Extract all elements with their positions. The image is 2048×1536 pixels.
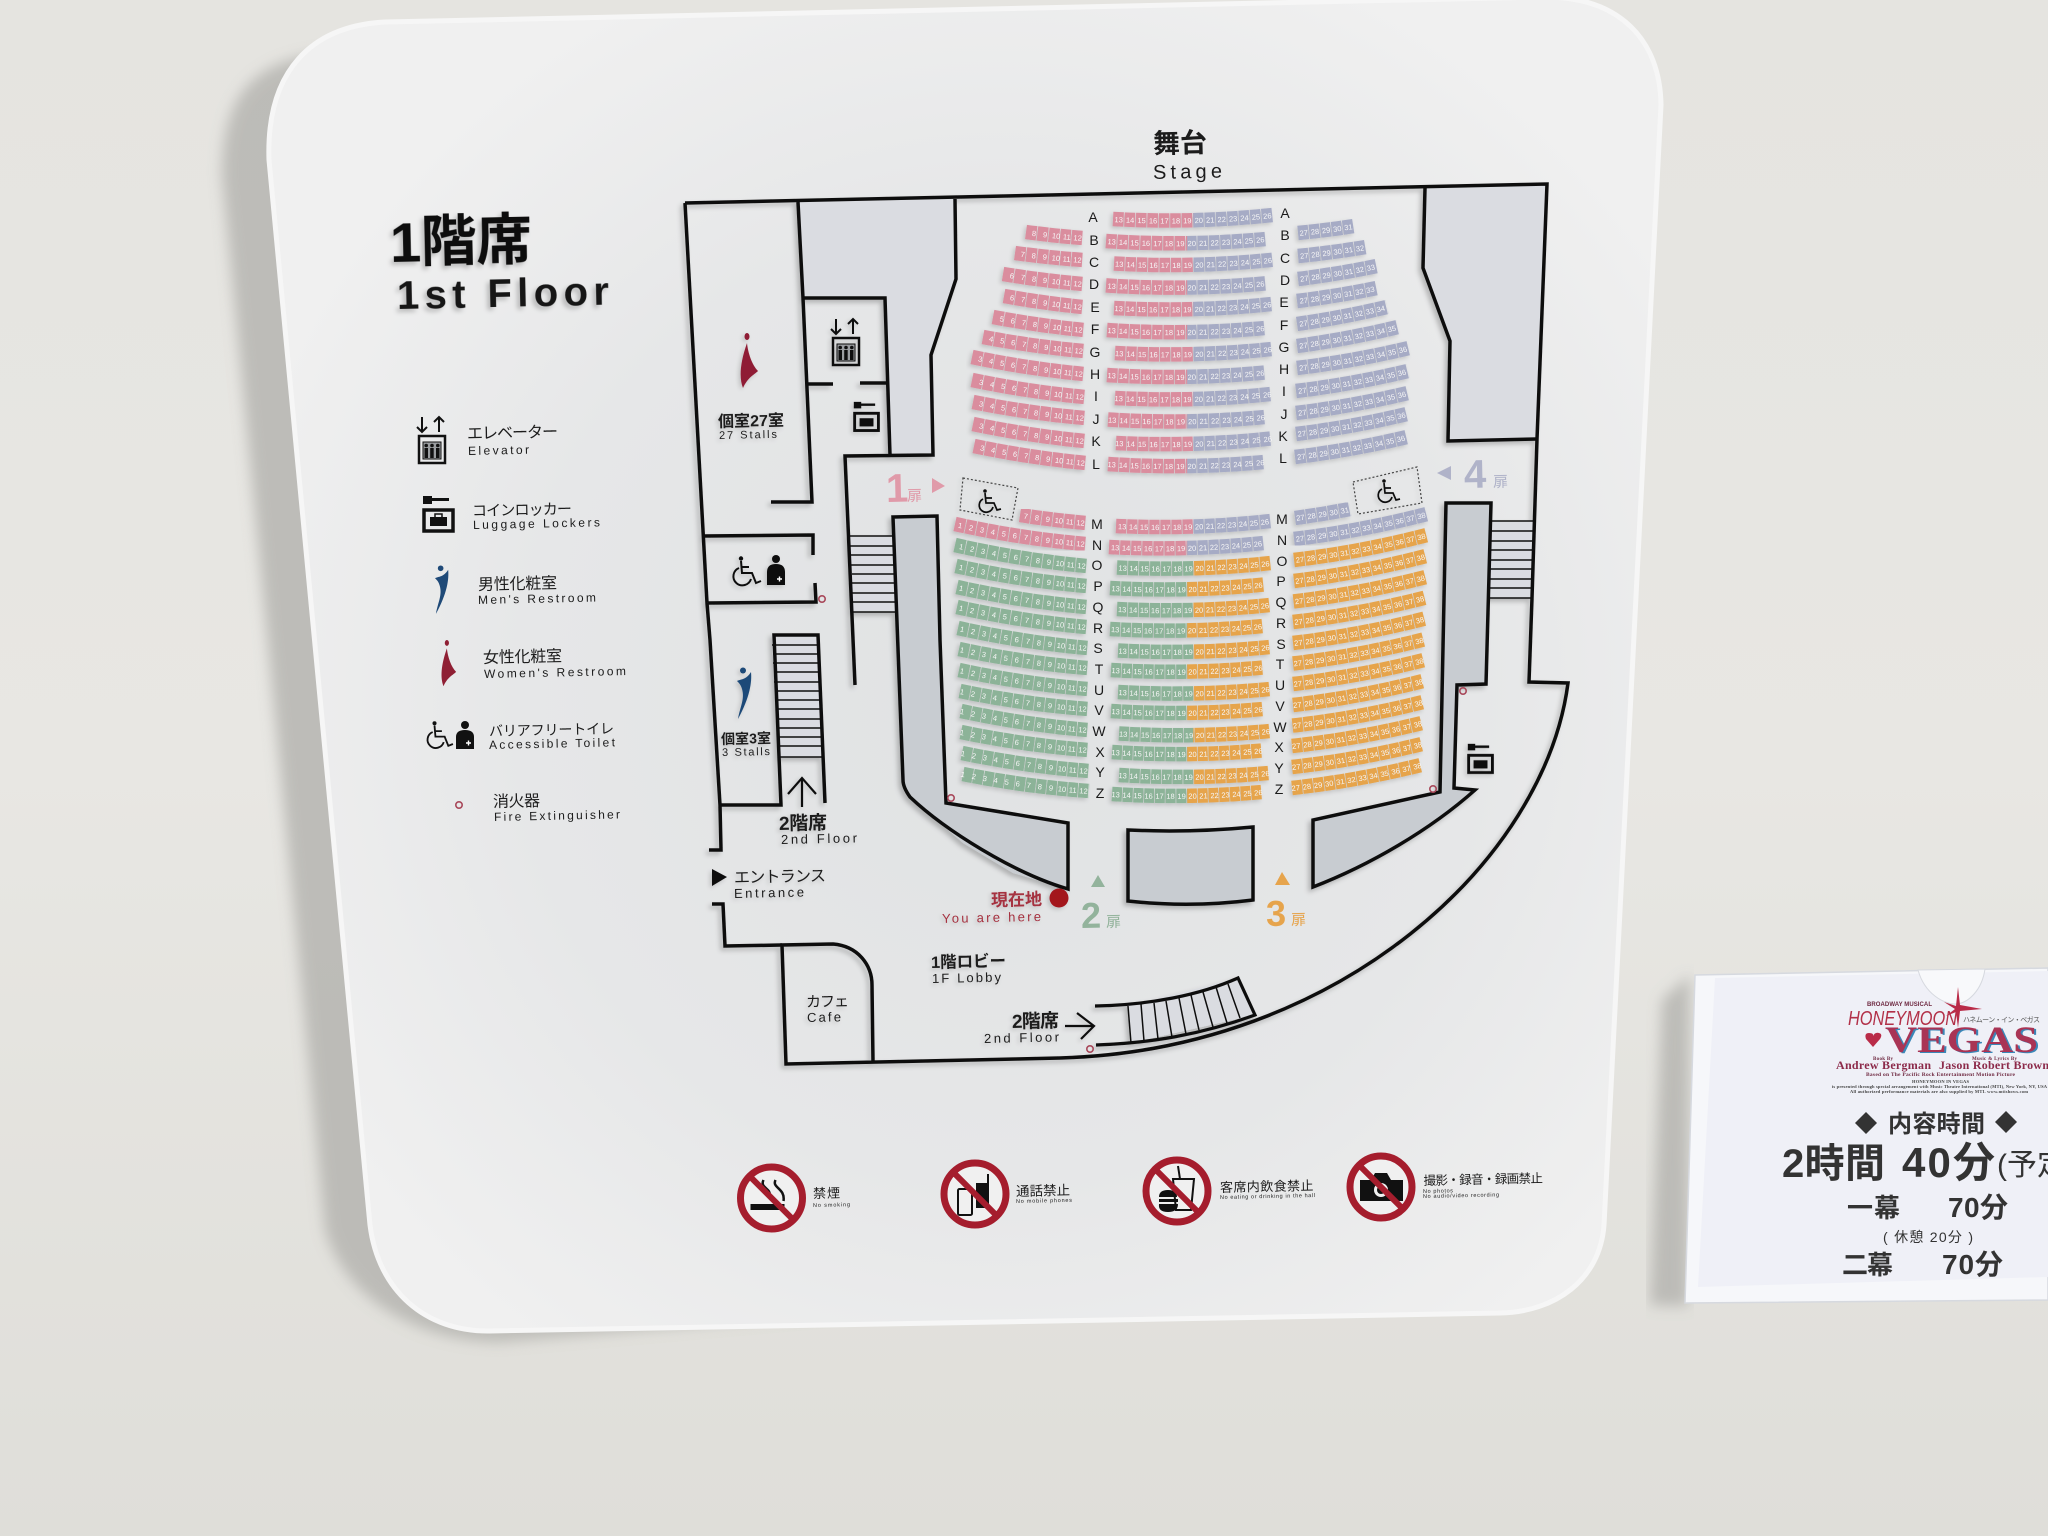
row letters: M xyxy=(1276,511,1288,527)
seats: upper left block: 5 6 7 8 9 10 11 12 xyxy=(1000,316,1082,333)
row letters: D xyxy=(1089,276,1099,292)
label: 2nd floor lobby: 2階席 xyxy=(1012,1010,1059,1033)
seats: lower centre block: 13 14 15 16 17 18 19 20 21 22 23 24 25 26 xyxy=(1118,685,1270,698)
seats: lower centre block: 13 14 15 16 17 18 19 20 21 22 23 24 25 26 xyxy=(1118,517,1269,532)
paper sheet xyxy=(1698,971,2048,1287)
total running time: 40分 xyxy=(1902,1139,1995,1186)
row letters: Y xyxy=(1095,764,1105,780)
seats: lower left pink rows: 1 2 3 4 5 6 7 8 9 10 11 12 xyxy=(958,523,1084,547)
total running time xyxy=(1782,1139,2048,1186)
seats: lower left green rows: 1 2 3 4 5 6 7 8 9 10 11 12 xyxy=(959,666,1087,693)
holder notch xyxy=(1918,969,1985,1004)
seats: upper centre block: 13 14 15 16 17 18 19 20 21 22 23 24 25 26 xyxy=(1115,258,1272,268)
act two: 二幕 xyxy=(1842,1250,1893,1280)
seats: lower right orange rows: 27 28 29 30 31 32 33 34 35 36 37 38 xyxy=(1291,761,1422,793)
seats: lower centre block: 13 14 15 16 17 18 19 20 21 22 23 24 25 26 xyxy=(1111,580,1263,594)
flyer holder shadow xyxy=(1650,975,1690,1306)
act two: 70分 xyxy=(1942,1249,2003,1280)
row letters: F xyxy=(1280,317,1288,333)
seats: upper left block: 3 4 5 6 7 8 9 10 11 12 xyxy=(979,380,1084,400)
plan icons xyxy=(712,319,1492,1039)
row letters: V xyxy=(1275,698,1285,714)
row letters: U xyxy=(1094,682,1104,698)
seats: lower centre block: 13 14 15 16 17 18 19 20 21 22 23 24 25 26 xyxy=(1111,787,1263,800)
legend: luggage lockers: コインロッカー xyxy=(472,501,572,520)
legend: men's restroom: 男性化粧室 xyxy=(478,574,557,594)
legend: accessible toilet: バリアフリートイレ xyxy=(489,720,614,739)
door 2: 2 xyxy=(1081,895,1101,936)
row letters: G xyxy=(1090,344,1100,360)
seats: lower left green rows: 1 2 3 4 5 6 7 8 9 10 11 12 xyxy=(959,706,1087,734)
show logo: All authorized performance materials are also supplied by MTI. www.mtishows.com xyxy=(1850,1089,2028,1094)
row letters: H xyxy=(1279,361,1289,377)
door 2 xyxy=(1081,875,1121,936)
panel shadow on wall xyxy=(222,40,1200,1342)
door 4 xyxy=(1437,453,1508,497)
seats: lower right blue rows: 27 28 29 30 31 32 33 34 35 36 37 38 xyxy=(1295,510,1426,543)
row letters: S xyxy=(1276,636,1286,652)
title: 1st floor: 1階席 xyxy=(389,208,533,274)
show logo: HONEYMOON xyxy=(1848,1008,1957,1030)
sign: no eating or drinking: No eating or drinking in the hall xyxy=(1220,1193,1315,1201)
seats: upper centre block: 13 14 15 16 17 18 19 20 21 22 23 24 25 26 xyxy=(1115,346,1272,358)
seats: lower right orange rows: 27 28 29 30 31 32 33 34 35 36 37 38 xyxy=(1294,573,1426,606)
seats: lower centre block: 13 14 15 16 17 18 19 20 21 22 23 24 25 26 xyxy=(1111,539,1262,553)
seats: lower right orange rows: 27 28 29 30 31 32 33 34 35 36 37 38 xyxy=(1295,552,1426,585)
seats: lower centre block: 13 14 15 16 17 18 19 20 21 22 23 24 25 26 xyxy=(1118,768,1270,781)
legend: luggage lockers xyxy=(423,496,600,532)
seats: lower right blue rows: 27 28 29 30 31 xyxy=(1296,505,1350,522)
show logo: BROADWAY MUSICAL xyxy=(1867,1002,1932,1008)
icon: lockers right xyxy=(1468,744,1492,773)
floor plan walls xyxy=(685,184,1568,1064)
show logo: Jason Robert Brown xyxy=(1939,1058,2048,1072)
legend: elevator: Elevator xyxy=(468,443,529,458)
seats: upper left block: 8 9 10 11 12 xyxy=(1032,230,1082,241)
seats: lower left green rows: 1 2 3 4 5 6 7 8 9 10 11 12 xyxy=(959,624,1087,652)
seats: lower left green rows: 1 2 3 4 5 6 7 8 9 10 11 12 xyxy=(959,727,1087,754)
legend: women's restroom: 女性化粧室 xyxy=(483,647,562,667)
sign: no mobile phones xyxy=(944,1163,1072,1225)
row letters: G xyxy=(1279,339,1289,355)
upper right grey block xyxy=(1423,185,1546,441)
door 1: 扉 xyxy=(907,488,922,505)
flyer xyxy=(1685,968,2048,1303)
row letters: F xyxy=(1091,321,1099,337)
seats: upper left block: 3 4 5 6 7 8 9 10 11 12 xyxy=(979,424,1084,444)
seats: upper right block xyxy=(1291,219,1410,468)
intermission: ( 休憩 20分 ) xyxy=(1883,1229,1973,1245)
label: cafe: Cafe xyxy=(807,1009,841,1025)
label: 2nd floor stairs: 2nd Floor xyxy=(781,830,858,847)
right aisle outline xyxy=(1313,503,1491,887)
door 3: 扉 xyxy=(1291,912,1306,929)
acrylic holder xyxy=(1685,968,2048,1303)
seats: upper right block: 27 28 29 30 31 32 33 34 35 36 xyxy=(1298,370,1406,394)
seats: lower left green rows: 1 2 3 4 5 6 7 8 9 10 11 12 xyxy=(959,645,1087,672)
show logo: HONEYMOON IN VEGAS xyxy=(1912,1079,1969,1084)
label: entrance: Entrance xyxy=(734,885,804,901)
seats: lower left green rows: 1 2 3 4 5 6 7 8 9 10 11 12 xyxy=(960,748,1088,775)
stairs: left upper fill xyxy=(850,536,896,612)
legend: elevator xyxy=(417,417,558,463)
plan labels xyxy=(718,412,1060,1046)
seats: lower centre block: 13 14 15 16 17 18 19 20 21 22 23 24 25 26 xyxy=(1118,643,1270,656)
show logo: ハネムーン・イン・ベガス xyxy=(1963,1015,2040,1024)
seats: upper left block: 6 7 8 9 10 11 12 xyxy=(1010,295,1082,310)
label: you are here: 現在地 xyxy=(991,890,1042,910)
upper left grey block xyxy=(798,199,956,455)
show logo: VEGAS xyxy=(1885,1020,2038,1061)
legend: accessible toilet: Accessible Toilet xyxy=(489,735,616,752)
right aisle block xyxy=(1313,503,1491,887)
icon: men's restroom xyxy=(737,668,751,719)
seats: lower left green rows: 1 2 3 4 5 6 7 8 9 10 11 12 xyxy=(959,586,1086,610)
sign: no photos or recording: 撮影・録音・録画禁止 xyxy=(1423,1170,1543,1188)
stage label: Stage xyxy=(1153,161,1222,184)
left aisle outline xyxy=(893,516,1068,889)
center block xyxy=(1128,827,1253,904)
seats: upper centre block: 13 14 15 16 17 18 19 20 21 22 23 24 25 26 xyxy=(1108,415,1265,425)
label: cafe: カフェ xyxy=(806,993,849,1011)
seats: lower left green rows: 1 2 3 4 5 6 7 8 9 10 11 12 xyxy=(959,544,1086,569)
seats: upper centre block: 13 14 15 16 17 18 19 20 21 22 23 24 25 26 xyxy=(1108,460,1264,470)
label: 27 stalls xyxy=(718,412,784,442)
row letters: K xyxy=(1278,428,1288,444)
door 3: 3 xyxy=(1266,893,1286,934)
seats: upper right block: 27 28 29 30 31 32 33 34 35 36 xyxy=(1298,412,1406,437)
label: lobby xyxy=(931,950,1006,986)
door 2: 扉 xyxy=(1106,914,1121,931)
seats: upper centre block xyxy=(1102,208,1273,477)
row letters: M xyxy=(1091,516,1103,532)
act one: 一幕 xyxy=(1847,1193,1900,1223)
seats: upper left block: 3 4 5 6 7 8 9 10 11 12 xyxy=(980,446,1084,466)
label: 3 stalls: 3 Stalls xyxy=(722,746,771,759)
interior walls: restrooms and elevator xyxy=(771,199,956,685)
row letters: R xyxy=(1093,620,1103,636)
sign panel xyxy=(269,0,1661,1331)
label: 2nd floor stairs xyxy=(779,812,858,847)
label: 2nd floor stairs: 2階席 xyxy=(779,812,827,835)
seats: upper left block: 6 7 8 9 10 11 12 xyxy=(1010,273,1082,287)
center block outline xyxy=(1128,827,1253,904)
seats: lower right orange rows: 27 28 29 30 31 32 33 34 35 36 37 38 xyxy=(1293,656,1424,688)
row letters: W xyxy=(1273,719,1287,735)
show logo: Based on The Pacific Rock Entertainment Motion Picture xyxy=(1866,1072,2016,1078)
label: entrance xyxy=(734,868,826,901)
sign: no mobile phones: No mobile phones xyxy=(1016,1198,1072,1205)
row letters: P xyxy=(1093,578,1103,594)
seats: lower left green rows: 1 2 3 4 5 6 7 8 9 10 11 12 xyxy=(959,565,1086,589)
act two xyxy=(1842,1249,2003,1280)
seats: lower right orange rows: 27 28 29 30 31 32 33 34 35 36 37 38 xyxy=(1295,531,1426,564)
legend: luggage lockers: Luggage Lockers xyxy=(473,515,600,532)
seats: upper centre block: 13 14 15 16 17 18 19 20 21 22 23 24 25 26 xyxy=(1114,213,1272,224)
sign: no smoking: 禁煙 xyxy=(813,1185,840,1201)
row letters: I xyxy=(1094,388,1098,404)
legend: fire extinguisher: Fire Extinguisher xyxy=(494,807,620,824)
show logo: VEGAS xyxy=(1887,1021,2040,1062)
seats: lower centre block: 13 14 15 16 17 18 19 20 21 22 23 24 25 26 xyxy=(1119,727,1270,740)
entrance triangle xyxy=(712,869,727,886)
seats: lower left green rows: 1 2 3 4 5 6 7 8 9 10 11 12 xyxy=(959,687,1087,713)
row letters: X xyxy=(1095,744,1105,760)
seats: lower centre block: 13 14 15 16 17 18 19 20 21 22 23 24 25 26 xyxy=(1118,559,1270,573)
wheelchair space right xyxy=(1353,467,1422,514)
show logo: Music & Lyrics By xyxy=(1972,1057,2018,1062)
show logo xyxy=(1832,987,2048,1094)
label: 27 stalls: 27 Stalls xyxy=(719,429,778,442)
row letters: J xyxy=(1280,406,1288,422)
seats: lower right orange rows: 27 28 29 30 31 32 33 34 35 36 37 38 xyxy=(1293,635,1424,668)
show logo: is presented through special arrangement with Music Theatre International (MTI), New York, NY, USA xyxy=(1832,1084,2048,1089)
row letters: P xyxy=(1276,573,1286,589)
seats: upper left block: 4 5 6 7 8 9 10 11 12 xyxy=(989,336,1082,354)
upper right block outline xyxy=(1423,188,1537,441)
sign: no smoking: No smoking xyxy=(813,1202,850,1209)
total running time: 2時間 xyxy=(1782,1142,1885,1186)
legend: women's restroom xyxy=(442,640,626,686)
stairs: lobby fill xyxy=(1128,978,1255,1043)
seats: upper right block: 27 28 29 30 31 32 33 34 35 36 xyxy=(1298,392,1406,416)
sign: no photos or recording: No audio/video recording xyxy=(1423,1192,1499,1200)
row letters: T xyxy=(1095,661,1104,677)
you are here marker xyxy=(1050,888,1068,908)
row letters: X xyxy=(1274,739,1284,755)
running time heading: 内容時間 xyxy=(1888,1111,1985,1138)
seats: lower right orange rows: 27 28 29 30 31 32 33 34 35 36 37 38 xyxy=(1294,594,1425,626)
door 1: 1 xyxy=(886,467,909,511)
seats: upper left block: 3 4 5 6 7 8 9 10 11 12 xyxy=(978,356,1082,377)
label: lobby: 1F Lobby xyxy=(932,970,1002,986)
seats: upper right block: 27 28 29 30 31 32 33 34 35 xyxy=(1300,326,1396,349)
seats: upper right block: 27 28 29 30 31 32 33 34 35 36 xyxy=(1300,346,1407,371)
seats: upper right block: 27 28 29 30 31 32 33 34 xyxy=(1300,306,1385,327)
seats: upper right block: 27 28 29 30 31 32 xyxy=(1300,246,1364,259)
show logo: Andrew Bergman xyxy=(1836,1058,1931,1072)
legend: fire extinguisher: 消火器 xyxy=(493,792,540,811)
row letters: B xyxy=(1089,232,1099,248)
seats: upper left block xyxy=(968,224,1086,474)
legend: men's restroom xyxy=(435,565,596,614)
stairs: right upper fill xyxy=(1489,521,1533,598)
row letters: S xyxy=(1093,640,1103,656)
row letters: Q xyxy=(1276,594,1287,610)
label: 3 stalls: 個室3室 xyxy=(721,730,771,747)
row letters: W xyxy=(1092,723,1106,739)
seats: upper left block: 7 8 9 10 11 12 xyxy=(1021,252,1082,263)
seats: upper centre block: 13 14 15 16 17 18 19 20 21 22 23 24 25 26 xyxy=(1116,436,1272,448)
seats: upper centre block: 13 14 15 16 17 18 19 20 21 22 23 24 25 26 xyxy=(1108,237,1264,246)
label: entrance: エントランス xyxy=(734,868,826,887)
seats: lower centre block: 13 14 15 16 17 18 19 20 21 22 23 24 25 26 xyxy=(1111,705,1263,717)
door 4: 扉 xyxy=(1493,474,1508,491)
seats: upper centre block: 13 14 15 16 17 18 19 20 21 22 23 24 25 26 xyxy=(1108,281,1264,291)
outer walls xyxy=(685,184,1568,1064)
legend: women's restroom: Women's Restroom xyxy=(484,664,626,681)
seats: lower left green rows xyxy=(950,538,1090,802)
row letters: A xyxy=(1280,205,1290,221)
row letters: N xyxy=(1277,532,1287,548)
label: 27 stalls: 個室27室 xyxy=(718,412,784,431)
seats: lower left pink rows: 7 8 9 10 11 12 xyxy=(1024,514,1084,526)
icon: accessible toilet xyxy=(733,555,785,585)
row letters: Q xyxy=(1093,599,1104,615)
seats: upper centre block: 13 14 15 16 17 18 19 20 21 22 23 24 25 26 xyxy=(1108,370,1264,380)
door 4: 4 xyxy=(1464,453,1487,497)
row letters: Y xyxy=(1274,760,1284,776)
arrow: right to 2nd floor xyxy=(1065,1013,1094,1039)
seats: upper right block: 27 28 29 30 31 xyxy=(1300,224,1352,236)
stage label xyxy=(1153,128,1222,184)
wheelchair space left xyxy=(960,478,1018,520)
row letters: J xyxy=(1092,411,1100,427)
seats: lower left green rows: 1 2 3 4 5 6 7 8 9 10 11 12 xyxy=(960,769,1088,795)
seats: upper right block: 27 28 29 30 31 32 33 xyxy=(1300,286,1374,304)
row letters: C xyxy=(1089,254,1099,270)
door 3 xyxy=(1266,872,1306,934)
row letters: K xyxy=(1091,433,1101,449)
label: 2nd floor lobby: 2nd Floor xyxy=(984,1029,1060,1046)
seats: upper right block: 27 28 29 30 31 32 33 34 35 36 xyxy=(1298,436,1405,460)
row letters: A xyxy=(1088,209,1098,225)
row letters: I xyxy=(1282,383,1286,399)
row letters: H xyxy=(1090,366,1100,382)
seats: lower right orange rows: 27 28 29 30 31 32 33 34 35 36 37 38 xyxy=(1293,677,1424,709)
left aisle block xyxy=(893,516,1068,889)
label: cafe xyxy=(806,993,849,1025)
seats: lower centre block xyxy=(1105,514,1271,807)
door 1 xyxy=(886,467,945,511)
label: you are here: You are here xyxy=(942,909,1041,926)
running time heading xyxy=(1855,1111,2017,1138)
row letters: Z xyxy=(1096,785,1105,801)
prohibition signs xyxy=(740,1156,1543,1229)
seats: lower centre block: 13 14 15 16 17 18 19 20 21 22 23 24 25 26 xyxy=(1111,622,1262,635)
icon: lockers xyxy=(854,402,878,431)
seats: upper centre block: 13 14 15 16 17 18 19 20 21 22 23 24 25 26 xyxy=(1114,302,1272,312)
legend: men's restroom: Men's Restroom xyxy=(478,591,596,607)
label: you are here xyxy=(942,890,1042,926)
legend xyxy=(417,417,626,824)
row letters: B xyxy=(1280,227,1290,243)
row letters: T xyxy=(1276,656,1285,672)
row letters: C xyxy=(1280,250,1290,266)
icon: women's restroom xyxy=(741,333,758,388)
seats: lower left pink rows xyxy=(950,509,1086,550)
label: lobby: 1階ロビー xyxy=(931,950,1006,972)
seats: lower right orange rows xyxy=(1288,528,1428,798)
seats: lower centre block: 13 14 15 16 17 18 19 20 21 22 23 24 25 26 xyxy=(1111,746,1263,759)
row letters: Z xyxy=(1275,781,1284,797)
sign: no eating or drinking: 客席内飲食禁止 xyxy=(1220,1178,1314,1195)
row letters: V xyxy=(1094,702,1104,718)
row letters: O xyxy=(1277,553,1288,569)
seats: upper left block: 3 4 5 6 7 8 9 10 11 12 xyxy=(979,401,1084,421)
sign: no photos or recording xyxy=(1350,1156,1543,1218)
seats: lower left green rows: 1 2 3 4 5 6 7 8 9 10 11 12 xyxy=(959,606,1086,630)
row letters: L xyxy=(1279,450,1287,466)
sign: no photos or recording: No photos xyxy=(1423,1188,1453,1195)
seats: lower centre block: 13 14 15 16 17 18 19 20 21 22 23 24 25 26 xyxy=(1111,663,1263,676)
row letters: E xyxy=(1279,294,1289,310)
seats: lower centre block: 13 14 15 16 17 18 19 20 21 22 23 24 25 26 xyxy=(1118,601,1269,615)
label: 2nd floor lobby xyxy=(984,1010,1060,1046)
legend: elevator: エレベーター xyxy=(467,423,558,443)
legend: accessible toilet xyxy=(428,720,616,752)
arrow: up to 2nd floor xyxy=(788,778,816,807)
seats: lower right orange rows: 27 28 29 30 31 32 33 34 35 36 37 38 xyxy=(1294,614,1425,647)
act one: 70分 xyxy=(1948,1192,2008,1223)
label: 3 stalls xyxy=(721,730,771,759)
sign: no mobile phones: 通話禁止 xyxy=(1016,1183,1070,1199)
row letters: O xyxy=(1092,557,1103,573)
row letters: E xyxy=(1090,299,1100,315)
row letters: D xyxy=(1280,272,1290,288)
title: 1st floor xyxy=(389,208,609,318)
stair rungs xyxy=(850,536,896,612)
legend: fire extinguisher xyxy=(456,792,620,824)
row letters: R xyxy=(1276,615,1286,631)
stairs: lower left fill xyxy=(772,635,823,757)
show logo: Book By xyxy=(1873,1057,1894,1062)
stage label: 舞台 xyxy=(1153,128,1207,159)
seats: upper centre block: 13 14 15 16 17 18 19 20 21 22 23 24 25 26 xyxy=(1108,326,1264,336)
row letters: L xyxy=(1092,456,1100,472)
sign: no smoking xyxy=(740,1167,850,1229)
fire extinguisher markers xyxy=(819,596,1466,1052)
row letters: U xyxy=(1275,677,1285,693)
row letters: N xyxy=(1092,537,1102,553)
row letters xyxy=(1088,205,1290,801)
seats: lower right orange rows: 27 28 29 30 31 32 33 34 35 36 37 38 xyxy=(1292,719,1423,750)
seats: lower right orange rows: 27 28 29 30 31 32 33 34 35 36 37 38 xyxy=(1292,698,1424,730)
icon: elevator xyxy=(831,319,859,365)
act one xyxy=(1847,1192,2008,1223)
seats: lower right orange rows: 27 28 29 30 31 32 33 34 35 36 37 38 xyxy=(1292,740,1423,771)
seats: upper centre block: 13 14 15 16 17 18 19 20 21 22 23 24 25 26 xyxy=(1114,392,1271,402)
sign: no eating or drinking xyxy=(1146,1160,1315,1222)
title: 1st floor: 1st Floor xyxy=(397,270,609,318)
seats: upper right block: 27 28 29 30 31 32 33 xyxy=(1300,264,1375,282)
